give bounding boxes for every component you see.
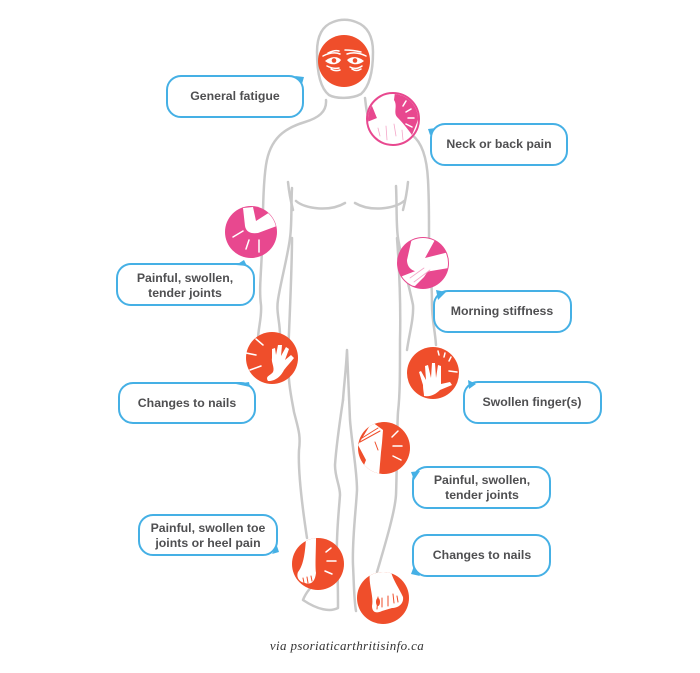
- callout: painful joints left: tender joints: [148, 286, 222, 300]
- circle icon: morning stiffness arm: [397, 237, 449, 289]
- circle icon: neck and back pain: [366, 92, 420, 145]
- callout: painful toe joints: [139, 515, 279, 555]
- callout: painful toe joints: joints or heel pain: [154, 536, 261, 550]
- callout: painful joints left: Painful, swollen,: [137, 271, 233, 285]
- callout: painful joints right: tender joints: [445, 488, 519, 502]
- callout: neck or back pain: [428, 124, 567, 165]
- callout: painful joints left: [117, 260, 254, 305]
- body outline: [258, 20, 436, 611]
- callout: painful toe joints: Painful, swollen toe: [151, 521, 266, 535]
- circle icon: swollen knee: [358, 422, 410, 476]
- circle icon: painful elbow: [225, 206, 277, 258]
- callout: painful joints right: [411, 467, 550, 508]
- callout: morning stiffness: Morning stiffness: [451, 304, 553, 318]
- callout: general fatigue: General fatigue: [190, 89, 280, 103]
- callout: changes to nails right: Changes to nails: [433, 548, 531, 562]
- circle icon: swollen fingers: [407, 347, 459, 399]
- circle icon: swollen hand left: [246, 332, 298, 384]
- callout: neck or back pain: Neck or back pain: [446, 137, 552, 151]
- callout: swollen fingers: Swollen finger(s): [482, 395, 582, 409]
- callout: painful joints right: Painful, swollen,: [434, 473, 530, 487]
- source credit: via psoriaticarthritisinfo.ca: [270, 638, 424, 653]
- circle icon: swollen foot and heel: [292, 538, 344, 590]
- callout: general fatigue: [167, 76, 304, 117]
- callout: swollen fingers: [464, 380, 601, 423]
- circle icon: fatigued eyes: [318, 35, 370, 87]
- circle icon: toes and nails: [357, 572, 409, 624]
- callout: changes to nails left: [119, 382, 255, 423]
- callout: morning stiffness: [434, 290, 571, 332]
- callout: changes to nails right: [411, 535, 550, 576]
- callout: changes to nails left: Changes to nails: [138, 396, 236, 410]
